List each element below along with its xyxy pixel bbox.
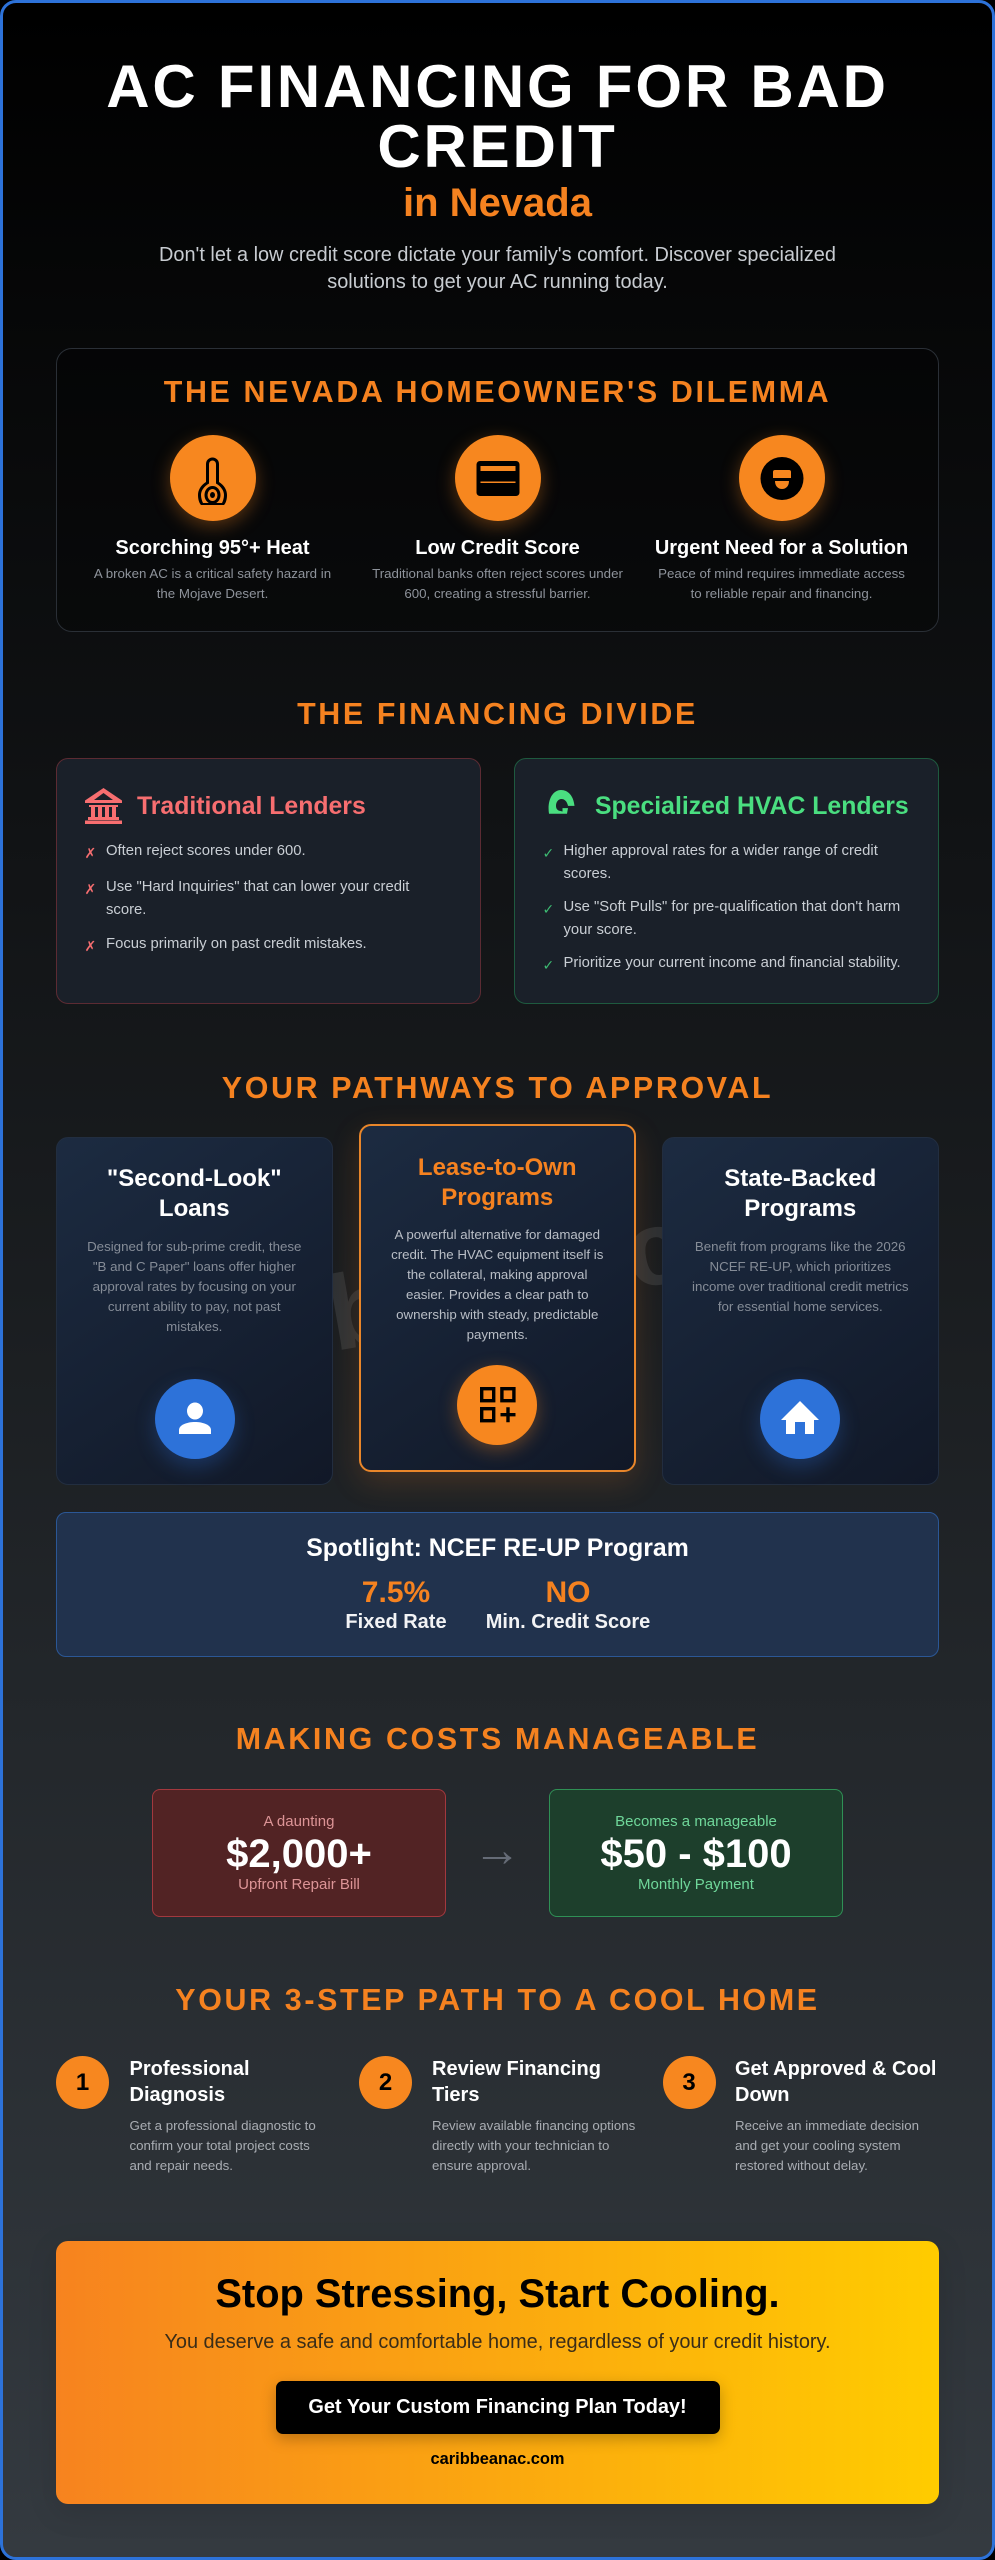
item 1: scores. <box>564 866 611 882</box>
step text: restored without delay. <box>735 2158 868 2173</box>
step title: Professional <box>130 2058 250 2080</box>
item 2: Use "Hard Inquiries" that can lower your credit <box>106 878 409 894</box>
step title: Get Approved & Cool <box>735 2058 936 2080</box>
step text: Receive an immediate decision <box>735 2118 919 2133</box>
card title: Programs <box>441 1184 553 1210</box>
item: urgent need <box>655 430 908 601</box>
item 2: your score. <box>564 922 637 938</box>
step title <box>735 2058 936 2106</box>
number badge: 1 <box>76 2069 89 2096</box>
amount: $50 - $100 <box>600 1832 792 1876</box>
card title: "Second-Look" <box>107 1165 282 1192</box>
item 3: ✗ <box>84 938 96 954</box>
item 2: Use "Soft Pulls" for pre-qualification that don't harm <box>564 898 900 914</box>
item 2 <box>542 898 900 938</box>
panel: the Nevada homeowner's dilemma <box>56 348 939 632</box>
step text: ensure approval. <box>432 2158 531 2173</box>
caption: Upfront Repair Bill <box>238 1876 360 1893</box>
step title: Diagnosis <box>130 2084 225 2106</box>
heading: making costs manageable: MAKING COSTS MANAGEABLE <box>236 1722 759 1756</box>
step text <box>432 2118 635 2173</box>
description: A broken AC is a critical safety hazard in <box>94 566 331 581</box>
card text: Designed for sub-prime credit, these <box>87 1239 301 1254</box>
step 3 <box>663 2056 936 2173</box>
card text: current ability to pay, not past <box>108 1299 281 1314</box>
icon: home <box>760 1379 840 1459</box>
card title: Lease-to-Own <box>418 1154 577 1180</box>
card: lease-to-own programs (featured) <box>359 1124 636 1472</box>
panel: call to action <box>56 2241 939 2504</box>
step title <box>432 2058 601 2106</box>
step title <box>130 2058 250 2106</box>
icon: arch <box>548 790 574 814</box>
value: 7.5% <box>362 1576 430 1609</box>
label: Min. Credit Score <box>486 1611 650 1633</box>
icon: credit card <box>454 435 540 521</box>
card text: approval rates by focusing on your <box>93 1279 296 1294</box>
item 1: ✓ <box>542 846 554 862</box>
card title <box>418 1154 577 1210</box>
item 2: score. <box>106 902 146 918</box>
item 2: ✓ <box>542 902 554 918</box>
panel: traditional lenders <box>56 758 480 1004</box>
list <box>84 842 410 954</box>
card text: credit. The HVAC equipment itself is <box>391 1246 603 1262</box>
caption: Becomes a manageable <box>615 1812 777 1830</box>
CTA headline: Stop Stressing, Start Cooling. <box>215 2272 780 2316</box>
step text: and repair needs. <box>130 2158 233 2173</box>
card: second-look loans <box>56 1137 332 1485</box>
intro text: solutions to get your AC running today. <box>327 271 668 293</box>
heading: the financing divide: THE FINANCING DIVIDE <box>297 696 698 730</box>
heading: Traditional Lenders <box>137 793 366 820</box>
item 1: ✗ <box>84 846 96 862</box>
heading: Specialized HVAC Lenders <box>595 793 909 820</box>
item 1 <box>542 842 878 882</box>
intro text: Don't let a low credit score dictate your family's comfort. Discover specialized <box>159 244 836 266</box>
step text <box>130 2118 316 2173</box>
step text: Review available financing options <box>432 2118 635 2133</box>
description: Traditional banks often reject scores under <box>372 566 623 581</box>
card text: easier. Provides a clear path to <box>406 1286 589 1302</box>
step 1 <box>56 2056 316 2173</box>
card title: Loans <box>159 1195 230 1222</box>
caption: Monthly Payment <box>638 1876 754 1893</box>
panel: specialized HVAC lenders <box>514 758 939 1004</box>
card title: Programs <box>744 1195 856 1222</box>
number badge <box>359 2056 412 2109</box>
card text: payments. <box>467 1326 528 1342</box>
description <box>658 566 905 601</box>
step 2 <box>359 2056 635 2173</box>
description: Peace of mind requires immediate access <box>658 566 905 581</box>
card title <box>724 1165 876 1222</box>
card text: ownership with steady, predictable <box>396 1306 598 1322</box>
box: upfront repair bill <box>152 1789 446 1917</box>
icon: shield badge <box>738 435 824 521</box>
watermark letter b: b <box>318 1246 403 1374</box>
box: monthly payment <box>549 1789 843 1917</box>
step text: and get your cooling system <box>735 2138 901 2153</box>
step text <box>735 2118 919 2173</box>
label: Urgent Need for a Solution <box>655 536 908 558</box>
card text: "B and C Paper" loans offer higher <box>93 1259 296 1274</box>
card title: State-Backed <box>724 1165 876 1192</box>
intro text <box>159 244 836 293</box>
card text: income over traditional credit metrics <box>692 1279 909 1294</box>
step title: Review Financing <box>432 2058 601 2080</box>
card text: mistakes. <box>166 1319 222 1334</box>
step title: Tiers <box>432 2084 479 2106</box>
icon: person <box>154 1379 234 1459</box>
heading: THE NEVADA HOMEOWNER'S DILEMMA <box>164 374 831 408</box>
description <box>94 566 331 601</box>
spotlight title: Spotlight: NCEF RE-UP Program <box>306 1535 689 1562</box>
item 2 <box>84 878 410 918</box>
arrow: → <box>473 1824 521 1877</box>
item 3: Prioritize your current income and financial stability. <box>564 955 901 971</box>
icon: bank <box>85 788 122 824</box>
number badge: 2 <box>379 2069 392 2096</box>
title: AC FINANCING FOR BAD <box>106 53 889 120</box>
label: Scorching 95°+ Heat <box>115 536 310 558</box>
step text: Get a professional diagnostic to <box>130 2118 316 2133</box>
card text: the collateral, making approval <box>407 1266 587 1282</box>
subtitle: in Nevada: in Nevada <box>403 180 592 224</box>
title: CREDIT <box>377 113 618 180</box>
card: state-backed programs <box>662 1137 939 1485</box>
number badge: 3 <box>682 2069 696 2096</box>
card text: for essential home services. <box>718 1299 883 1314</box>
amount: $2,000+ <box>226 1832 372 1876</box>
CTA text: You deserve a safe and comfortable home, regardless of your credit history. <box>164 2330 831 2352</box>
step text: directly with your technician to <box>432 2138 609 2153</box>
card text: NCEF RE-UP, which prioritizes <box>709 1259 891 1274</box>
list <box>542 842 901 974</box>
item 3: Focus primarily on past credit mistakes. <box>106 936 367 952</box>
item: scorching heat <box>94 430 331 601</box>
caption: A daunting <box>264 1812 334 1830</box>
icon: thermometer <box>170 435 256 521</box>
number badge <box>56 2056 109 2109</box>
card text <box>391 1226 603 1342</box>
title <box>106 53 889 180</box>
description: the Mojave Desert. <box>157 586 268 601</box>
step title: Down <box>735 2084 789 2106</box>
description: to reliable repair and financing. <box>691 586 872 601</box>
stat: minimum credit score <box>486 1576 650 1633</box>
value: NO <box>546 1576 590 1609</box>
label: Low Credit Score <box>415 536 580 558</box>
watermark letter c: c <box>615 1185 694 1312</box>
item 3: ✓ <box>542 958 554 974</box>
label: Fixed Rate <box>345 1611 447 1633</box>
item 1: Higher approval rates for a wider range of credit <box>564 842 878 858</box>
card text <box>692 1239 909 1314</box>
card text: Benefit from programs like the 2026 <box>695 1239 906 1254</box>
CTA button: Get Your Custom Financing Plan Today! <box>308 2396 687 2418</box>
item: low credit score <box>372 430 623 601</box>
panel: spotlight NCEF RE-UP program <box>56 1512 939 1657</box>
number badge <box>662 2056 716 2109</box>
card text <box>87 1239 301 1334</box>
card title <box>107 1165 282 1222</box>
heading: your pathways to approval: YOUR PATHWAYS TO APPROVAL <box>222 1070 773 1104</box>
step text: confirm your total project costs <box>130 2138 310 2153</box>
website: caribbeanac.com <box>431 2450 564 2468</box>
icon: grid plus <box>457 1365 537 1445</box>
CTA button <box>276 2381 720 2434</box>
card text: A powerful alternative for damaged <box>394 1226 600 1242</box>
description <box>372 566 623 601</box>
description: 600, creating a stressful barrier. <box>404 586 591 601</box>
item 1: Often reject scores under 600. <box>106 842 306 858</box>
stat: fixed rate <box>345 1576 447 1633</box>
header: title and intro <box>106 53 889 293</box>
heading: 3-step path: YOUR 3-STEP PATH TO A COOL HOME <box>175 1982 820 2016</box>
item 2: ✗ <box>84 882 96 898</box>
